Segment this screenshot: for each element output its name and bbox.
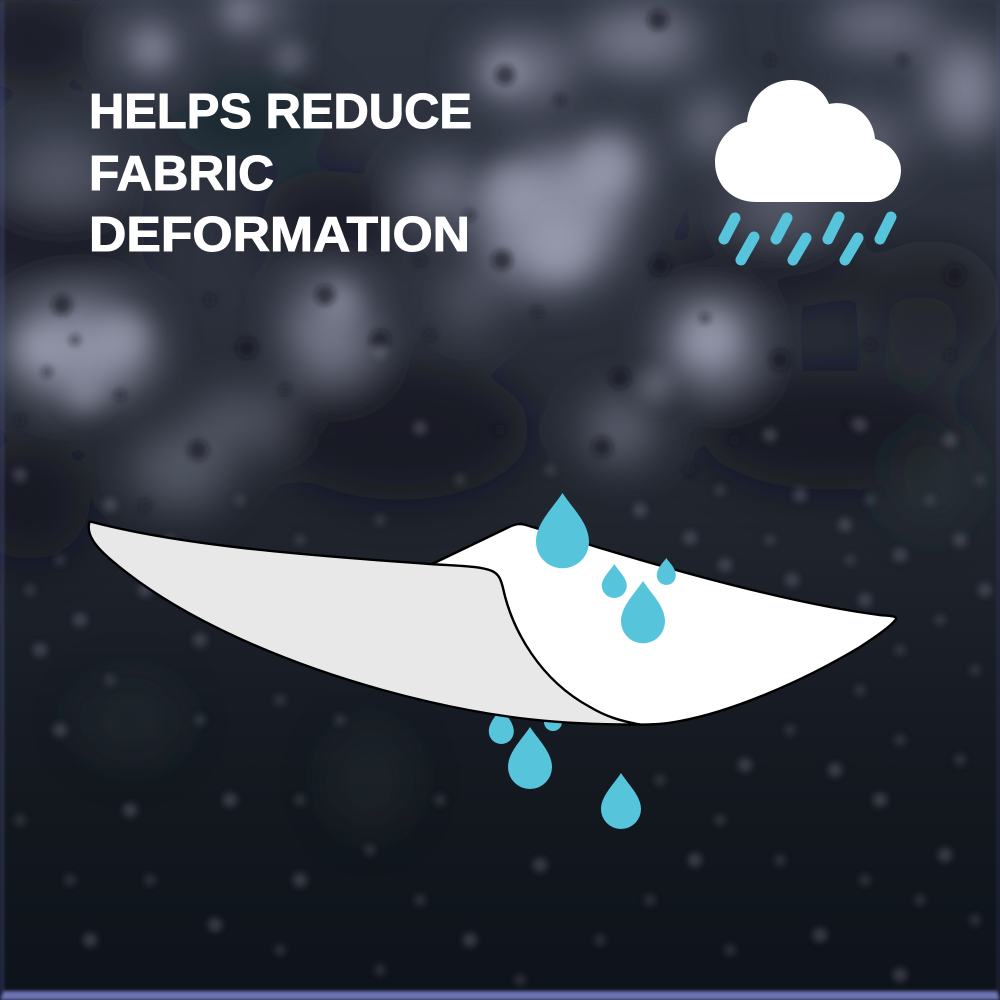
fabric folded flap bbox=[89, 522, 640, 725]
fabric top layer bbox=[430, 524, 896, 725]
rain streaks bbox=[724, 217, 891, 260]
water drops falling below fabric bbox=[489, 706, 641, 829]
title: DEFORMATION bbox=[89, 208, 470, 262]
cloud bbox=[715, 80, 901, 202]
title: FABRIC bbox=[89, 147, 274, 201]
water drops on fabric bbox=[536, 493, 676, 643]
title: HELPS REDUCE bbox=[89, 85, 472, 139]
fabric sheet bbox=[89, 522, 896, 725]
icon: rain cloud bbox=[715, 80, 901, 260]
title bbox=[89, 85, 472, 262]
